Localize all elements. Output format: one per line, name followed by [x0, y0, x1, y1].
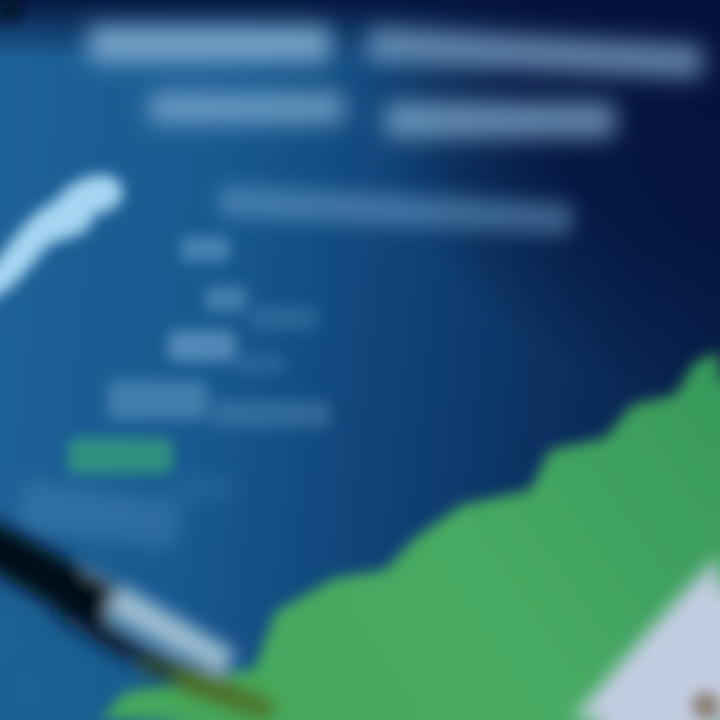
pen: black barrel and light tip: [0, 524, 275, 720]
highlighted list item: green label: [68, 438, 173, 474]
top left corner dark mark: [0, 0, 22, 20]
title: blurred heading: [88, 26, 705, 138]
white curved shape in corner: [572, 555, 720, 720]
chart: green stepped area: [100, 352, 720, 720]
list: blurred text rows: [108, 236, 330, 428]
icon: light blue curved arrow: [0, 175, 123, 296]
dark corner detail: [692, 692, 720, 720]
list: lower blurred rows: [17, 478, 235, 550]
subtitle: blurred line: [217, 185, 574, 235]
